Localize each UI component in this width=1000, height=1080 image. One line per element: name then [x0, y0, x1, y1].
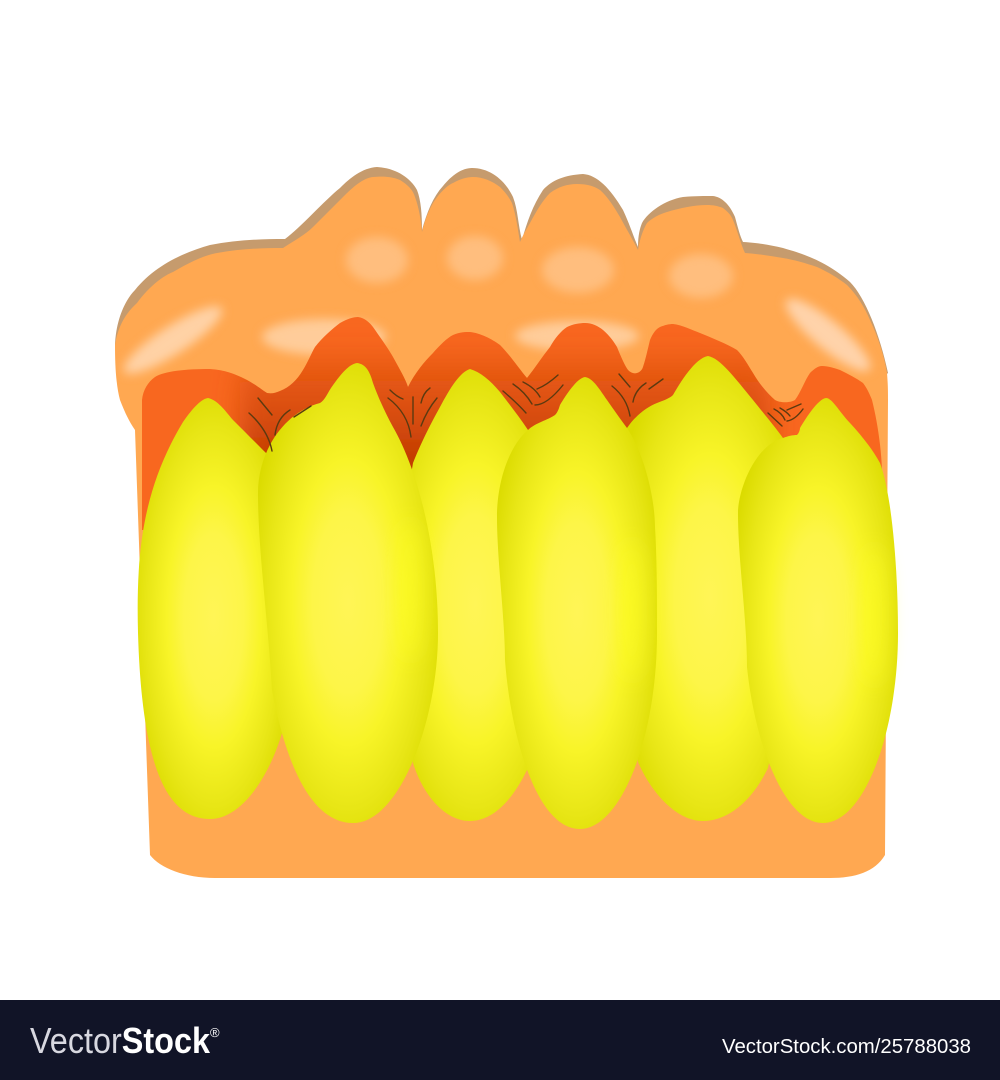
- registered mark: ®: [210, 1025, 220, 1040]
- VectorStock logo: VectorStock: [30, 1020, 211, 1061]
- orange tissue body: [115, 177, 888, 878]
- tan top edge shadow: [115, 167, 888, 380]
- red inner epithelium layer: [142, 317, 882, 530]
- tissue block: [115, 167, 898, 878]
- yellow follicle 5 (back): [620, 356, 800, 821]
- darker shading in red layer valleys: [232, 356, 780, 470]
- yellow follicle 6 (front): [738, 398, 898, 823]
- yellow follicle 4 (front): [497, 377, 657, 829]
- image id url: VectorStock.com/25788038: [722, 1036, 971, 1058]
- bright yellow spots on front follicles: [398, 520, 886, 685]
- yellow follicle 3 (back): [390, 369, 560, 821]
- footer bar: [0, 1000, 1000, 1080]
- highlights on tissue surface: [117, 236, 878, 383]
- yellow follicle 1 (front): [138, 398, 290, 819]
- hair-like cilia strokes: [249, 374, 803, 451]
- yellow follicle 2 (front): [258, 363, 438, 823]
